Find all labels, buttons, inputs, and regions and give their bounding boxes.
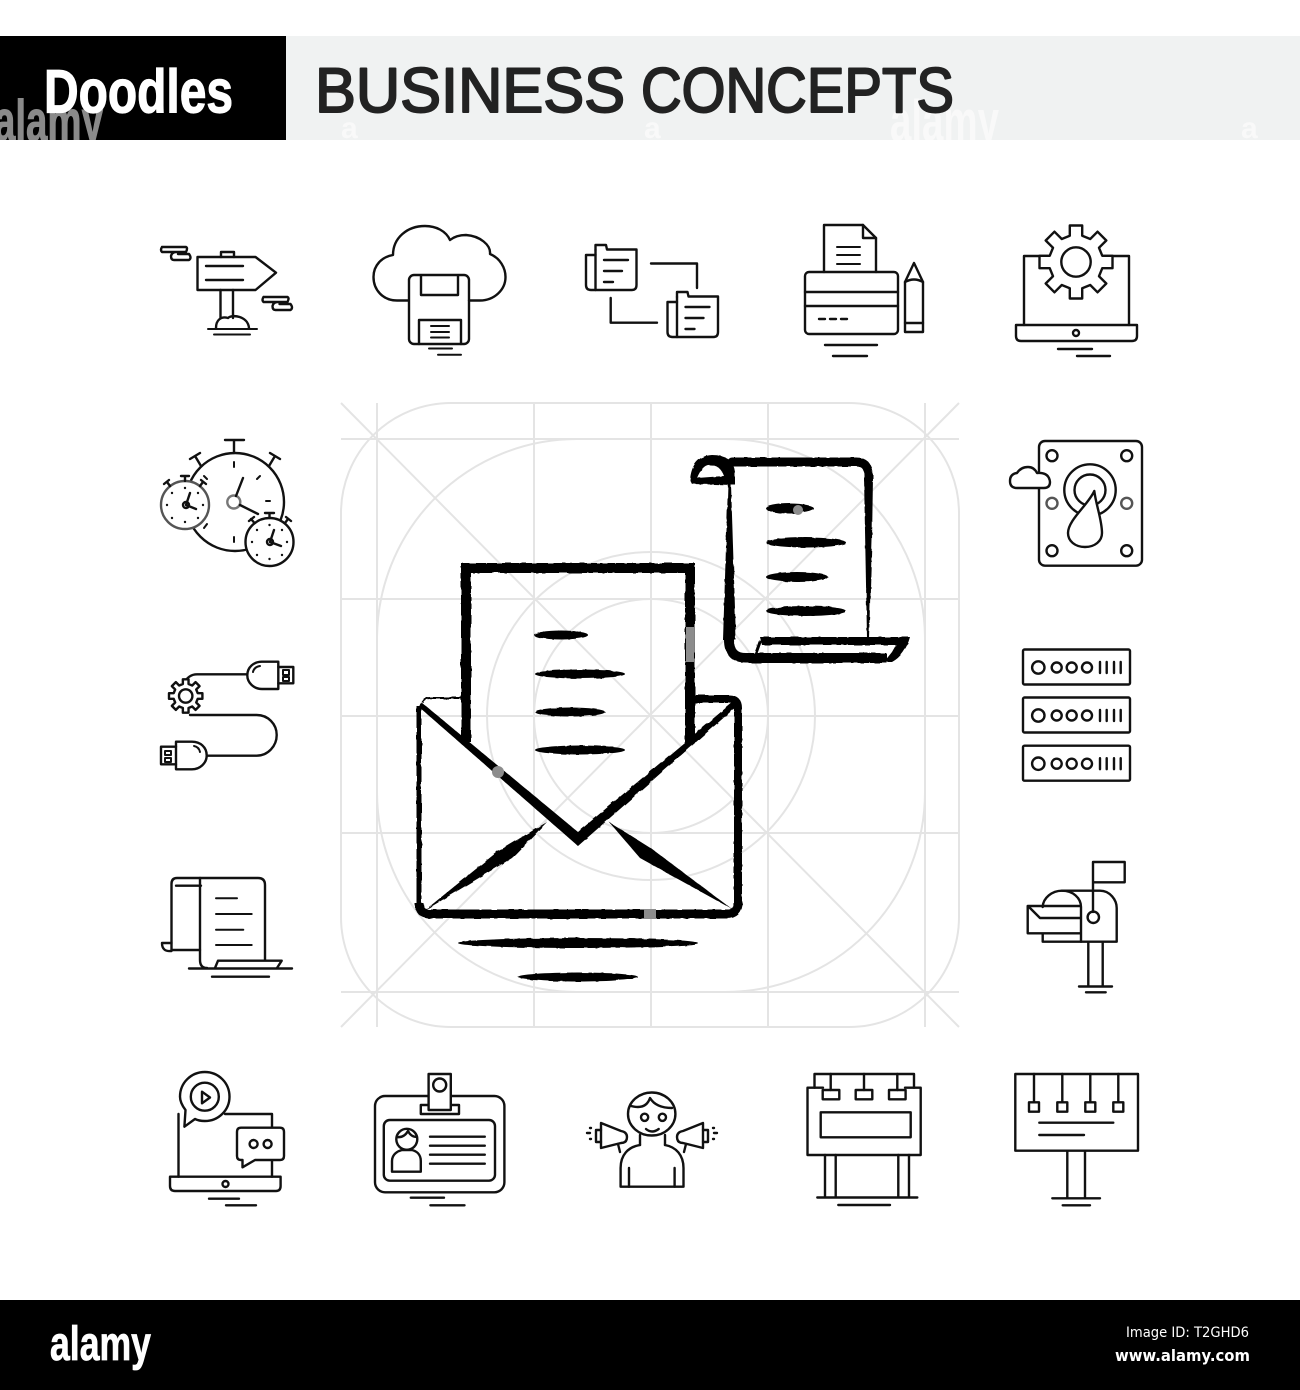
watermark: faint alamy: a bbox=[644, 112, 661, 145]
heading: Doodles: Doodles bbox=[44, 58, 233, 126]
icon: linked folders bbox=[586, 245, 718, 337]
icon: billboard on post bbox=[1015, 1074, 1138, 1205]
icon: cloud with floppy disk bbox=[374, 226, 506, 355]
icon: laptop with gear bbox=[1016, 226, 1137, 356]
watermark: faint alamy: alamy bbox=[890, 89, 999, 154]
footer text: website: www.alamy.com bbox=[1115, 1346, 1250, 1365]
icon: laptop with video and chat bubbles bbox=[170, 1072, 284, 1205]
heading: Business Concepts: CONCEPTS bbox=[641, 56, 954, 126]
icon: server rack bbox=[1023, 650, 1130, 781]
icon: USB cable with gear bbox=[161, 662, 293, 769]
icon: mailbox bbox=[1028, 862, 1125, 992]
footer bar bbox=[0, 1300, 1300, 1390]
heading: Business Concepts bbox=[315, 56, 954, 126]
footer text: image id: Image ID: T2GHD6 bbox=[1126, 1325, 1249, 1341]
ground shadow lines bbox=[458, 938, 698, 982]
icon: three stopwatches bbox=[161, 440, 294, 566]
icon construction grid bbox=[341, 403, 959, 1027]
central illustration: open envelope with letter and scroll bbox=[419, 455, 910, 982]
envelope flap bbox=[419, 701, 737, 846]
icon: ID card badge bbox=[375, 1074, 504, 1205]
icon: hard disk with cloud bbox=[1010, 441, 1142, 566]
icon: billboard with hanging boxes bbox=[808, 1074, 921, 1205]
watermark fragments over central illustration bbox=[492, 505, 803, 919]
scroll bbox=[690, 455, 910, 662]
envelope bbox=[419, 698, 738, 914]
icon: paper scroll bbox=[162, 878, 292, 977]
icon: signpost bbox=[161, 247, 292, 334]
envelope lower folds bbox=[424, 822, 547, 911]
heading: Business Concepts: BUSINESS bbox=[315, 56, 625, 126]
watermark: faint alamy: a bbox=[1241, 112, 1258, 145]
letter text lines bbox=[534, 630, 625, 754]
watermark: faint alamy bbox=[342, 98, 1258, 140]
header band bbox=[0, 36, 1300, 140]
scroll text lines bbox=[766, 504, 846, 616]
icon: person with megaphones bbox=[587, 1092, 717, 1187]
icon: printer and pencil bbox=[805, 225, 923, 356]
letter sheet bbox=[466, 568, 690, 754]
watermark: faint alamy: a bbox=[341, 112, 358, 145]
footer logo: alamy: alamy bbox=[50, 1318, 151, 1371]
